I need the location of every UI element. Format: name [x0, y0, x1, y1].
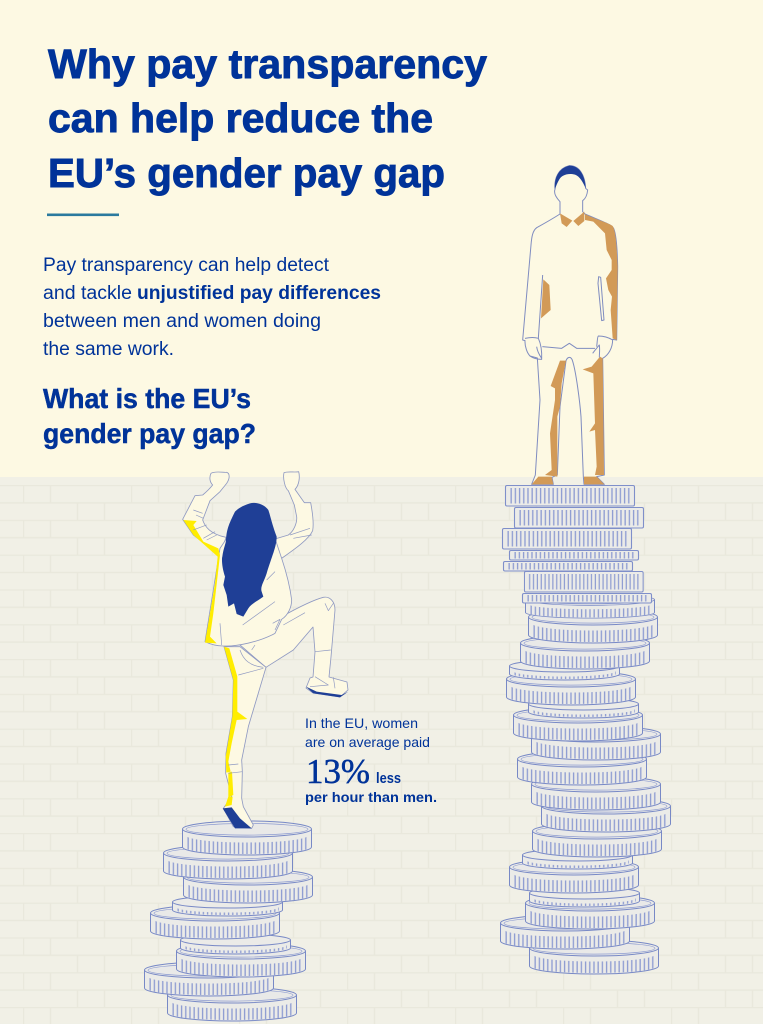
title: can help reduce the	[48, 95, 433, 141]
intro paragraph: Pay transparency can help detect	[43, 255, 330, 276]
woman: jacket	[205, 538, 292, 646]
woman: raised leg and shoe	[240, 597, 348, 697]
callout: 13% statistic: per hour than men.	[305, 789, 437, 805]
woman: standing leg and shoe	[223, 647, 266, 828]
callout: 13% statistic: less	[376, 770, 401, 787]
woman: hair	[222, 503, 277, 617]
man: body outline	[523, 166, 618, 484]
subheading: What is the EU’s	[43, 383, 251, 414]
callout: 13% statistic: 13%	[306, 752, 370, 791]
background: cream upper wall	[0, 0, 763, 477]
woman: raised arms and fists	[183, 472, 313, 558]
subheading: gender pay gap?	[43, 418, 256, 449]
callout: 13% statistic: are on average paid	[305, 734, 430, 750]
man: hair	[555, 166, 586, 189]
intro paragraph: the same work.	[43, 339, 174, 360]
background: brick wall	[0, 477, 763, 1024]
woman: yellow shading	[183, 520, 247, 807]
figure: woman climbing coins	[183, 472, 348, 828]
coin stack: woman (left, short)	[144, 821, 312, 1021]
coin stack: man (right, tall)	[500, 486, 670, 974]
woman: clothing detail lines	[193, 510, 335, 773]
figure: man standing on coins	[523, 166, 618, 484]
callout: 13% statistic: In the EU, women	[305, 715, 418, 731]
title	[48, 41, 487, 196]
callout: 13% statistic	[305, 715, 437, 805]
title underline	[47, 214, 119, 216]
subheading	[43, 383, 256, 449]
intro paragraph: between men and women doing	[43, 311, 321, 332]
man: clothing detail lines	[525, 275, 613, 359]
intro paragraph	[43, 255, 381, 360]
intro paragraph: and tackle	[43, 283, 132, 304]
man: orange shading	[532, 212, 618, 484]
title: EU’s gender pay gap	[48, 150, 445, 196]
title: Why pay transparency	[48, 41, 487, 87]
woman: shoe soles	[223, 687, 348, 828]
intro paragraph: unjustified pay differences	[137, 283, 381, 304]
